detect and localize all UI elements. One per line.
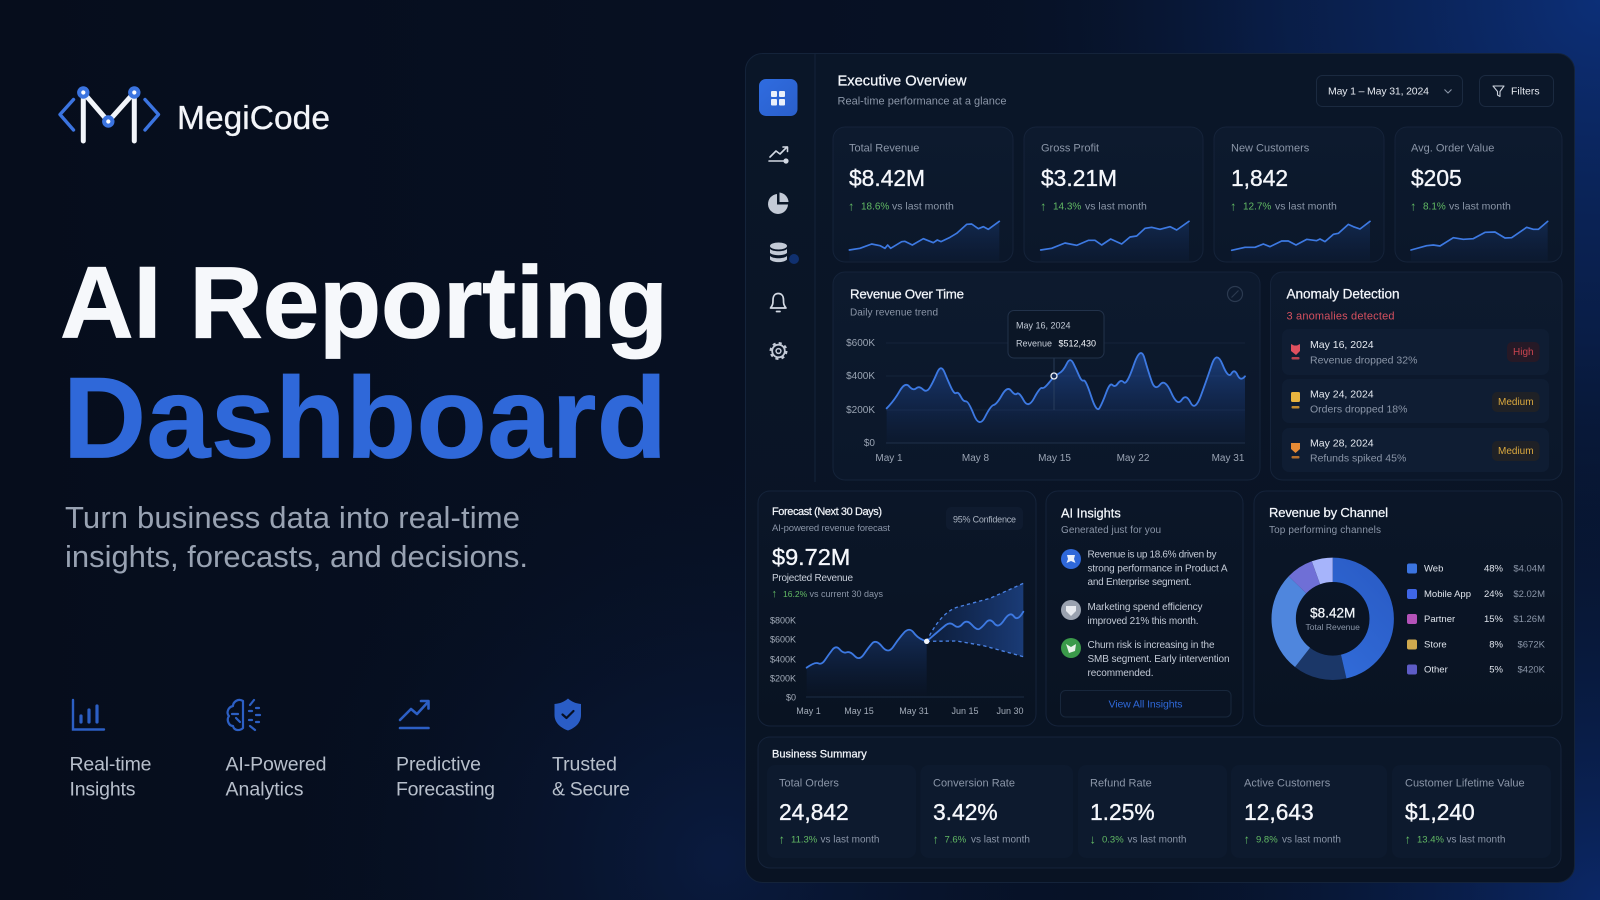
badge: confidence: [946, 507, 1023, 530]
label: Avg. Order Value: [1411, 143, 1494, 155]
filters button: Filters: [1511, 86, 1540, 98]
badge: high: High: [1513, 347, 1534, 358]
stat: total orders: Total Orders: [779, 778, 839, 790]
delta: 8.1%: [1423, 201, 1446, 212]
header: [838, 74, 1554, 108]
tooltip: $512,430: [1058, 339, 1096, 349]
panel: forecast: [758, 491, 1036, 726]
legend: mobile app: $2.02M: [1513, 589, 1545, 600]
stat: conversion rate: vs last month: [971, 834, 1030, 845]
y axis: $600K: [770, 635, 796, 645]
delta: 14.3%: [1053, 201, 1081, 212]
stat: active customers: vs last month: [1282, 834, 1341, 845]
heading: Revenue Over Time: [850, 287, 964, 302]
heading: Revenue by Channel: [1269, 505, 1388, 520]
feature: trusted and secure: [552, 698, 630, 801]
logo: MegiCode: [60, 86, 330, 141]
stat: total orders: vs last month: [820, 834, 879, 845]
stat: refund rate: [1078, 765, 1227, 858]
legend: other: $420K: [1518, 665, 1546, 676]
insight 1: Revenue is up 18.6% driven by: [1088, 549, 1216, 560]
delta: vs current 30 days: [810, 589, 884, 599]
stat: refund rate: vs last month: [1128, 834, 1186, 845]
insight 2: improved 21% this month.: [1088, 616, 1198, 627]
stat: active customers: [1231, 765, 1387, 858]
panel: revenue by channel: [1254, 491, 1562, 726]
x axis: May 8: [962, 453, 990, 464]
panel: business summary: [758, 737, 1561, 868]
icon: trend line: [400, 701, 428, 728]
heading: Anomaly Detection: [1286, 287, 1400, 302]
insight 2: Marketing spend efficiency: [1088, 602, 1202, 613]
stat: conversion rate: [920, 765, 1073, 858]
icon: dashboard button: [759, 79, 798, 116]
donut center: [1306, 605, 1360, 632]
stat: total orders: [767, 765, 916, 858]
value: $9.72M: [772, 544, 850, 570]
feature: AI-powered analytics: Analytics: [226, 779, 304, 801]
title line 2: Dashboard: [63, 355, 667, 483]
delta: ↑: [1040, 200, 1046, 214]
legend: partner: 15%: [1484, 614, 1504, 625]
y axis: $800K: [770, 616, 796, 626]
donut center: $8.42M: [1310, 605, 1355, 620]
x axis: Jun 15: [951, 706, 979, 716]
delta: vs last month: [892, 201, 954, 213]
stat: conversion rate: 3.42%: [933, 799, 998, 825]
subheading: Daily revenue trend: [850, 308, 938, 319]
delta: ↑: [848, 200, 854, 214]
insight 2: [1061, 600, 1202, 627]
delta: vs last month: [1275, 201, 1337, 213]
stat: active customers: 9.8%: [1256, 834, 1278, 845]
y axis: $600K: [846, 338, 875, 349]
insight 3: Churn risk is increasing in the: [1088, 640, 1215, 651]
line chart: [887, 353, 1245, 443]
label: Real-time: [70, 754, 152, 776]
icon: alert orange: [1291, 443, 1300, 458]
stat: customer lifetime value: 13.4%: [1417, 834, 1444, 845]
KPI card: gross profit: [1024, 127, 1203, 262]
insight 1: strong performance in Product A: [1088, 563, 1228, 574]
label: AI-Powered: [226, 754, 326, 776]
panel background: [746, 54, 1574, 882]
panel: revenue over time: [833, 272, 1260, 480]
insight 3: SMB segment. Early intervention: [1088, 654, 1230, 665]
stat: customer lifetime value: vs last month: [1446, 834, 1505, 845]
x axis: May 1: [875, 453, 903, 464]
legend: other: [1407, 664, 1546, 676]
legend: store: 8%: [1489, 640, 1504, 651]
delta: vs last month: [1449, 201, 1511, 213]
value: 1,842: [1231, 165, 1288, 191]
heading: Forecast (Next 30 Days): [772, 506, 882, 518]
sparkline: [849, 221, 999, 261]
KPI card: new customers: [1214, 127, 1384, 262]
row: May 28: May 28, 2024: [1310, 438, 1374, 450]
icon: pie: [768, 192, 788, 214]
value: $205: [1411, 165, 1462, 191]
tooltip: May 16, 2024: [1016, 321, 1071, 331]
subheading: Generated just for you: [1061, 525, 1161, 536]
label: New Customers: [1231, 143, 1310, 155]
row: May 28: [1282, 428, 1549, 472]
KPI card: average order value: [1395, 127, 1562, 262]
row: May 16: [1282, 329, 1549, 375]
row: May 24: [1282, 379, 1549, 423]
legend: web: Web: [1424, 564, 1443, 575]
subtitle: [65, 500, 528, 574]
feature: real-time insights: Insights: [70, 779, 136, 801]
button: view all insights: View All Insights: [1108, 699, 1182, 711]
badge: confidence: 95% Confidence: [953, 515, 1016, 525]
delta: vs last month: [1085, 201, 1147, 213]
button: view all insights: [1060, 690, 1231, 717]
legend: web: $4.04M: [1513, 564, 1545, 575]
icon: gear: [771, 343, 786, 359]
feature: real-time insights: [70, 700, 152, 801]
label: Predictive: [396, 754, 481, 776]
row: May 16: May 16, 2024: [1310, 339, 1374, 351]
legend: mobile app: 24%: [1484, 589, 1504, 600]
legend: other: Other: [1424, 665, 1448, 676]
legend: partner: [1407, 614, 1545, 625]
logo mark: [60, 86, 158, 141]
feature: trusted and secure: & Secure: [552, 779, 630, 801]
stat: refund rate: 1.25%: [1090, 799, 1155, 825]
y axis: $200K: [770, 674, 796, 684]
x axis: May 1: [796, 706, 821, 716]
tooltip: Revenue: [1016, 339, 1052, 349]
tooltip: [1008, 310, 1104, 358]
stat: active customers: Active Customers: [1244, 778, 1331, 790]
x axis: May 22: [1117, 453, 1150, 464]
y axis: $200K: [846, 405, 875, 416]
feature: predictive forecasting: [396, 701, 495, 801]
sidebar: [759, 79, 799, 359]
stat: total orders: 24,842: [779, 799, 849, 825]
filters button: [1480, 76, 1554, 106]
feature: predictive forecasting: Forecasting: [396, 779, 495, 801]
legend: partner: Partner: [1424, 614, 1455, 625]
insight 3: [1061, 638, 1230, 679]
legend: store: $672K: [1518, 640, 1546, 651]
date range control: May 1 – May 31, 2024: [1328, 86, 1429, 98]
donut chart: [1263, 550, 1402, 688]
legend: web: [1407, 564, 1545, 575]
legend: partner: $1.26M: [1513, 614, 1545, 625]
label: Gross Profit: [1041, 143, 1099, 155]
badge: high: [1507, 342, 1540, 362]
value: $8.42M: [849, 165, 925, 191]
y axis: [846, 338, 1245, 449]
row: May 16: Revenue dropped 32%: [1310, 355, 1417, 367]
date range control: [1316, 76, 1462, 106]
donut center: Total Revenue: [1306, 622, 1360, 632]
panel: anomaly detection: [1270, 272, 1562, 480]
stat: active customers: 12,643: [1244, 799, 1314, 825]
value label: Projected Revenue: [772, 573, 853, 584]
sparkline: [1232, 221, 1370, 261]
insight 3: recommended.: [1088, 668, 1154, 679]
icon: expand: [1228, 286, 1242, 302]
stat: conversion rate: 7.6%: [944, 834, 967, 845]
icon: shield: [554, 698, 581, 730]
subheading: Top performing channels: [1269, 525, 1381, 536]
badge: medium: Medium: [1498, 446, 1534, 457]
stat: customer lifetime value: $1,240: [1405, 799, 1475, 825]
stat: refund rate: 0.3%: [1102, 834, 1124, 845]
brand name: MegiCode: [177, 100, 330, 137]
marker: [1051, 358, 1057, 410]
panel: AI insights: [1046, 491, 1243, 726]
feature: AI-powered analytics: [226, 700, 326, 801]
icon: bell: [770, 294, 786, 312]
legend: other: 5%: [1489, 665, 1504, 676]
heading: Business Summary: [772, 749, 867, 761]
heading: executive overview: Executive Overview: [838, 74, 967, 90]
sparkline: [1041, 221, 1189, 261]
forecast chart: [807, 583, 1023, 697]
icon: database: [770, 242, 799, 264]
stat: total orders: ↑: [778, 833, 785, 847]
icon: trend: [769, 147, 788, 163]
x axis: May 31: [1212, 453, 1245, 464]
delta: 12.7%: [1243, 201, 1271, 212]
legend: web: 48%: [1484, 564, 1504, 575]
value: $3.21M: [1041, 165, 1117, 191]
icon: alert red: [1291, 344, 1300, 360]
legend: store: [1407, 640, 1546, 651]
stat: customer lifetime value: ↑: [1404, 833, 1411, 847]
icon: alert yellow: [1291, 392, 1300, 408]
heading: AI Insights: [1061, 506, 1121, 521]
x axis: May 15: [1038, 453, 1071, 464]
label: Total Revenue: [849, 143, 919, 155]
legend: mobile app: [1407, 589, 1545, 600]
stat: customer lifetime value: Customer Lifetime Value: [1405, 778, 1525, 790]
y axis: [770, 616, 1024, 703]
title line 1: AI Reporting: [60, 246, 668, 360]
stat: conversion rate: ↑: [932, 833, 939, 847]
row: May 24: May 24, 2024: [1310, 389, 1374, 401]
insight 1: and Enterprise segment.: [1088, 577, 1192, 588]
subheading: Real-time performance at a glance: [838, 96, 1006, 108]
KPI card: total revenue: [833, 127, 1013, 262]
dashboard panel: [746, 54, 1574, 882]
stat: conversion rate: Conversion Rate: [933, 778, 1015, 790]
x axis: [875, 453, 1245, 464]
subtitle: Turn business data into real-time: [65, 500, 520, 535]
badge: medium: [1492, 392, 1540, 412]
delta: 18.6%: [861, 201, 889, 212]
delta: ↑: [1410, 200, 1416, 214]
x axis: May 31: [899, 706, 929, 716]
delta: ↑: [1230, 200, 1236, 214]
x axis: [796, 706, 1024, 716]
badge: medium: Medium: [1498, 397, 1534, 408]
delta: 16.2%: [783, 589, 808, 599]
label: Trusted: [552, 754, 617, 776]
stat: customer lifetime value: [1392, 765, 1551, 858]
y axis: $0: [864, 438, 875, 449]
legend: [1407, 564, 1546, 676]
sparkline: [1411, 221, 1548, 261]
stat: total orders: 11.3%: [791, 834, 818, 845]
stat: refund rate: ↓: [1090, 833, 1096, 847]
row: May 28: Refunds spiked 45%: [1310, 453, 1406, 465]
alert count: 3 anomalies detected: [1286, 311, 1394, 323]
row: May 24: Orders dropped 18%: [1310, 404, 1407, 416]
stat: refund rate: Refund Rate: [1090, 778, 1152, 790]
title: [60, 246, 668, 483]
badge: medium: [1492, 441, 1540, 461]
stat: active customers: ↑: [1244, 833, 1250, 847]
legend: store: Store: [1424, 640, 1447, 651]
x axis: May 15: [844, 706, 874, 716]
y axis: $0: [786, 693, 796, 703]
icon: brain: [228, 700, 260, 730]
delta: ↑: [772, 588, 777, 600]
icon: bar chart: [73, 700, 104, 730]
subheading: AI-powered revenue forecast: [772, 523, 890, 534]
legend: mobile app: Mobile App: [1424, 589, 1471, 600]
y axis: $400K: [770, 655, 796, 665]
x axis: Jun 30: [996, 706, 1024, 716]
y axis: $400K: [846, 371, 875, 382]
insight 1: [1061, 549, 1228, 588]
subtitle: insights, forecasts, and decisions.: [65, 539, 528, 574]
